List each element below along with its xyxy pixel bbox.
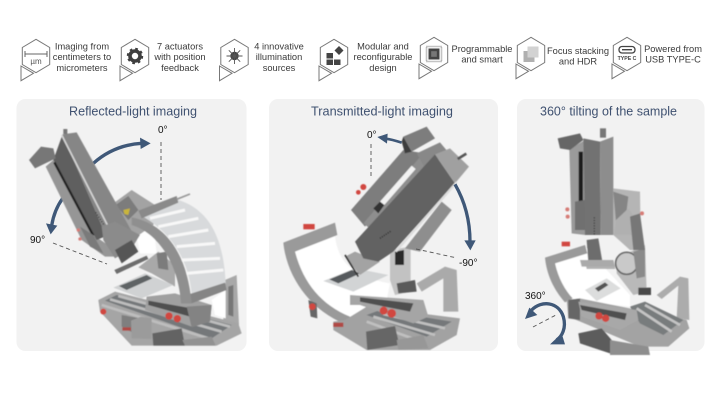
lower assembly — [545, 245, 689, 355]
lower assembly — [283, 223, 460, 350]
heading: reflected-light imaging: Reflected-light imaging — [69, 104, 197, 118]
icon: sun — [220, 39, 248, 81]
caption: imaging range: centimeters to — [53, 52, 111, 62]
panel: reflected-light imaging — [16, 99, 246, 351]
arrow: rotate to 90 degrees — [46, 198, 63, 234]
dashed reference lines — [371, 144, 457, 258]
caption: imaging range: Imaging from — [55, 42, 109, 52]
label: -90 degrees: -90° — [459, 258, 477, 269]
caption: actuators: 7 actuators — [157, 42, 203, 52]
label: 0 degrees: 0° — [367, 130, 377, 141]
caption: focus stacking: Focus stacking — [547, 46, 609, 56]
device: reflected-light configuration — [29, 129, 242, 346]
icon: USB type-C: TYPE C — [618, 56, 637, 62]
lower assembly — [98, 190, 242, 346]
feature: programmable — [419, 37, 512, 79]
arrow: rotate to -90 degrees — [455, 184, 476, 250]
feature: actuators — [120, 39, 206, 81]
icon: chip — [419, 37, 448, 79]
arrow: rotate to 0 degrees — [377, 134, 402, 144]
feature: focus stacking — [516, 37, 609, 79]
feature: usb power — [612, 37, 702, 79]
caption: illumination: 4 innovative — [254, 42, 304, 52]
objective head — [102, 222, 148, 274]
heading: 360 degree tilting: 360° tilting of the sample — [540, 104, 677, 118]
caption: usb power: Powered from — [644, 44, 702, 54]
caption: modular design: design — [369, 63, 397, 73]
feature: modular design — [319, 39, 412, 81]
caption: modular design: reconfigurable — [354, 52, 412, 62]
vertical column — [558, 128, 645, 267]
label: 360 degrees: 360° — [525, 291, 546, 302]
panel: transmitted-light imaging — [269, 99, 498, 351]
arrow: 360 degree rotation — [525, 304, 565, 344]
caption: illumination: sources — [263, 63, 296, 73]
panel: 360 degree tilting — [517, 99, 704, 355]
arrow: rotate to 0 degrees — [93, 138, 151, 163]
device: transmitted-light configuration — [283, 127, 469, 350]
caption: imaging range: micrometers — [56, 63, 108, 73]
caption: focus stacking: and HDR — [559, 57, 597, 67]
caption: modular design: Modular and — [357, 42, 409, 52]
tilted column — [345, 127, 469, 277]
feature: imaging range — [21, 39, 111, 81]
icon: modular blocks — [319, 39, 348, 81]
caption: usb power: USB TYPE-C — [645, 55, 701, 65]
caption: programmable: Programmable — [452, 44, 512, 54]
dashed rotation axis — [533, 315, 556, 327]
icon: gear — [120, 39, 149, 81]
dashed reference lines — [53, 142, 161, 264]
device: tilting configuration — [545, 128, 689, 355]
caption: illumination: illumination — [256, 52, 302, 62]
label: 90 degrees: 90° — [30, 235, 45, 246]
label: 0 degrees: 0° — [158, 125, 168, 136]
heading: transmitted-light imaging: Transmitted-light imaging — [311, 104, 453, 118]
tilted column — [29, 129, 136, 257]
icon: stacked layers — [516, 37, 545, 79]
feature: illumination — [220, 39, 304, 81]
caption: actuators: feedback — [161, 63, 199, 73]
caption: programmable: and smart — [461, 55, 503, 65]
icon: micrometer scale: µm — [30, 57, 42, 66]
caption: actuators: with position — [153, 52, 206, 62]
